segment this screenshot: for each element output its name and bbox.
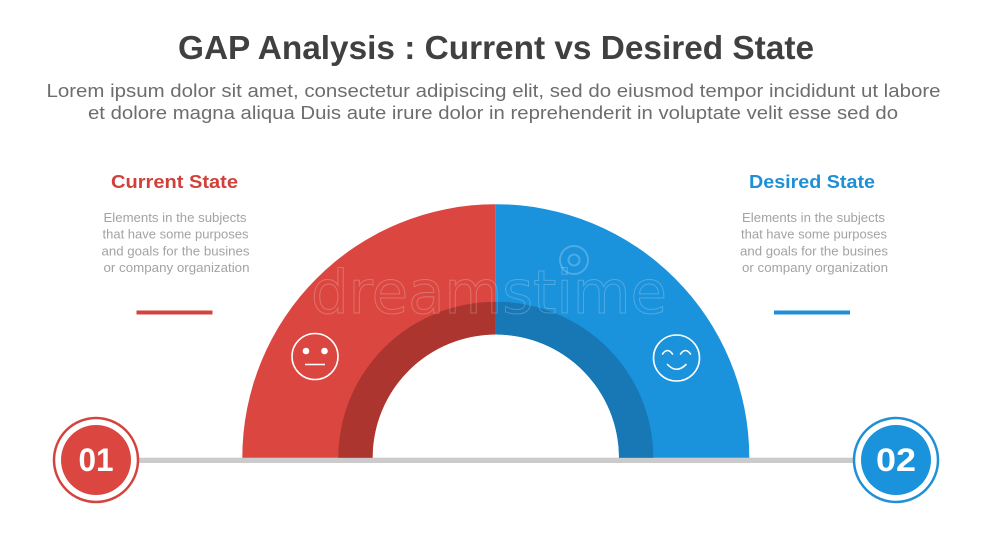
- right blue segment: [496, 204, 749, 458]
- panel: current state: [102, 172, 250, 314]
- description: current state: [102, 210, 250, 275]
- panel: desired state: [740, 172, 888, 314]
- half-ring diagram: [242, 204, 749, 458]
- badge 02: [854, 418, 938, 502]
- icon: neutral face: [292, 334, 338, 380]
- heading: desired state: Desired State: [749, 172, 875, 192]
- description: desired state: that have some purposes: [741, 227, 887, 242]
- heading: current state: Current State: [111, 172, 238, 192]
- title: GAP Analysis : Current vs Desired State: [178, 29, 814, 66]
- watermark: dreamstime: [311, 258, 667, 328]
- subtitle text: [46, 81, 940, 123]
- description: current state: that have some purposes: [102, 227, 249, 242]
- description: current state: and goals for the busines: [102, 244, 250, 258]
- left dark inner band: [338, 302, 496, 458]
- badge 02: 02: [876, 442, 916, 478]
- description: current state: or company organization: [104, 260, 250, 275]
- badge 01: 01: [78, 442, 114, 478]
- description: desired state: and goals for the busines: [740, 244, 888, 258]
- icon: smiling face: [654, 335, 700, 381]
- right dark inner band: [496, 302, 653, 458]
- badge 01: [54, 418, 138, 502]
- baseline connector: [130, 458, 860, 463]
- description: desired state: or company organization: [742, 260, 888, 275]
- accent bar: current state: [136, 310, 212, 314]
- accent bar: desired state: [774, 310, 850, 314]
- subtitle text: et dolore magna aliqua Duis aute irure dolor in reprehenderit in voluptate velit esse sed do: [88, 103, 898, 123]
- description: desired state: [740, 210, 888, 275]
- description: desired state: Elements in the subjects: [742, 210, 886, 225]
- subtitle text: Lorem ipsum dolor sit amet, consectetur adipiscing elit, sed do eiusmod tempor incididunt ut labore: [46, 81, 940, 101]
- left red segment: [242, 204, 496, 458]
- description: current state: Elements in the subjects: [104, 210, 247, 225]
